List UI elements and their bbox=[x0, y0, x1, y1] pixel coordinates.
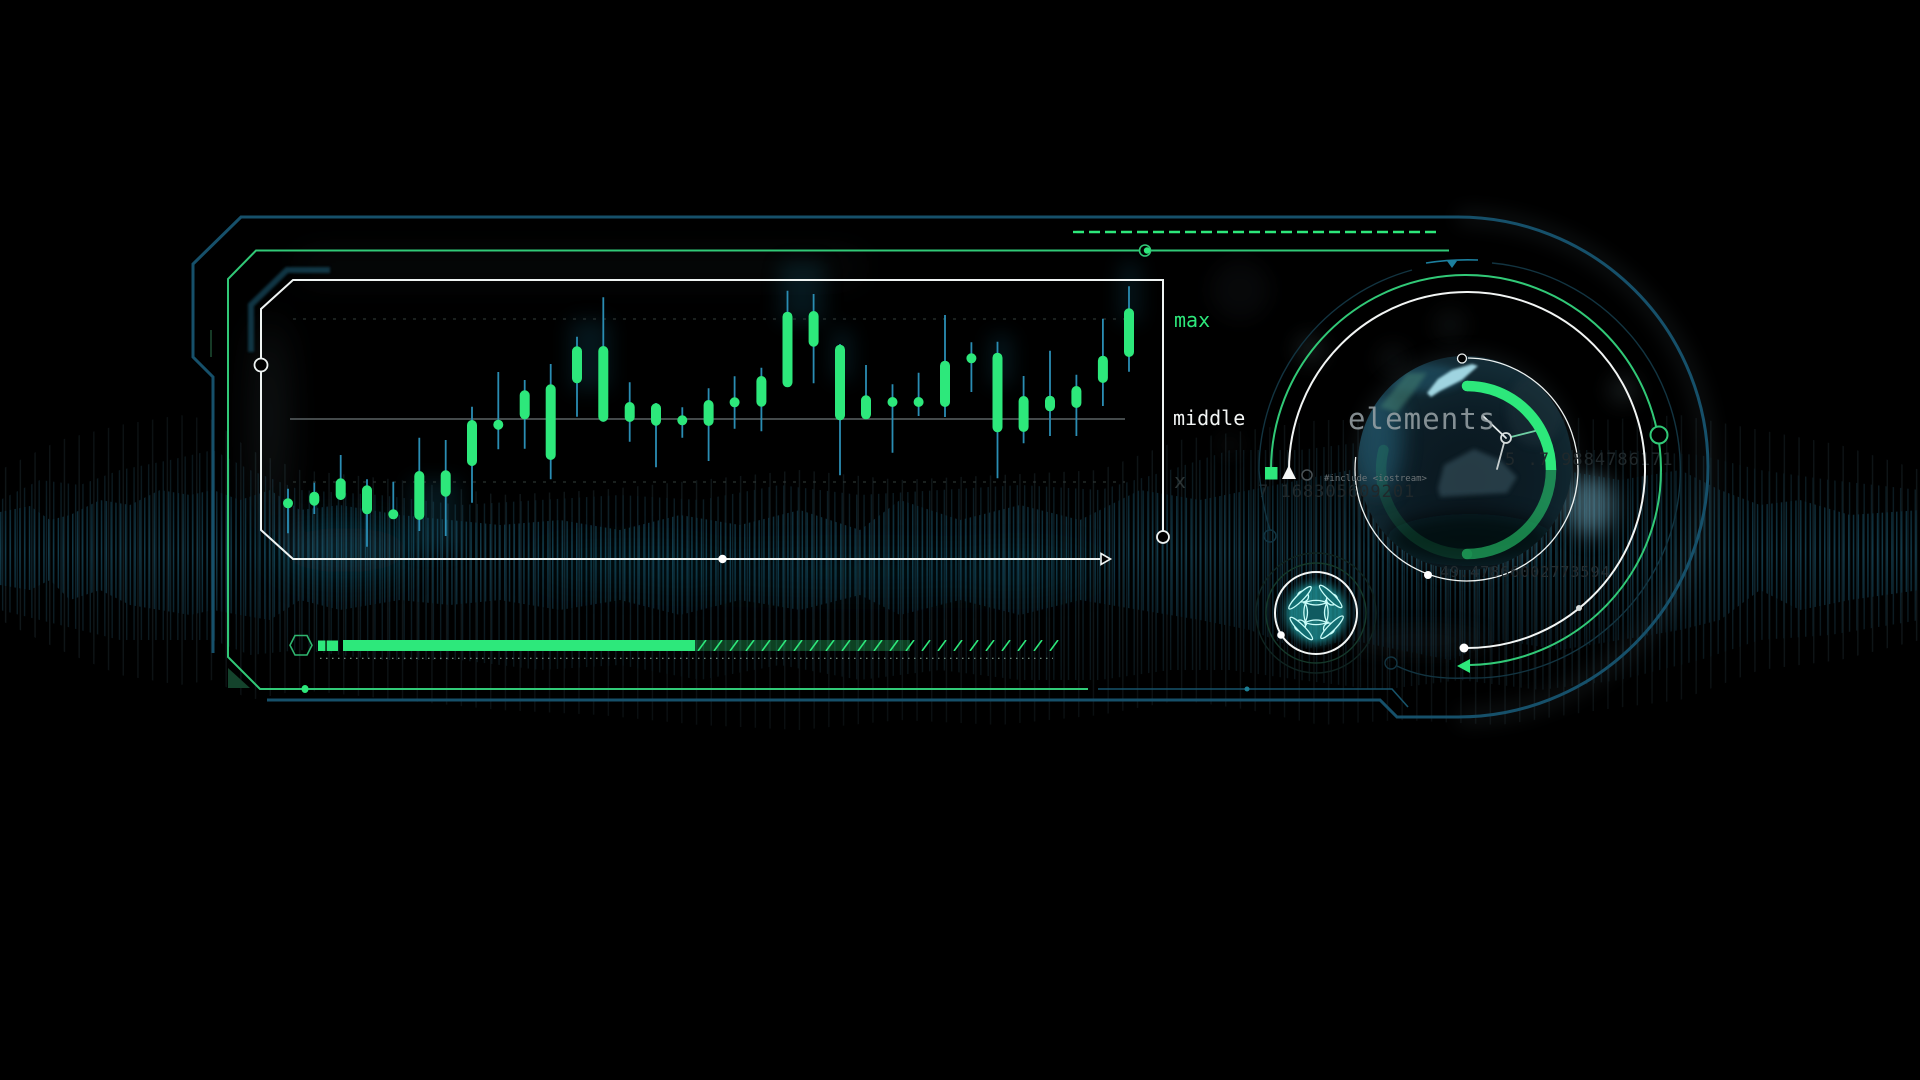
teal haze bbox=[258, 262, 1110, 580]
frame knob bbox=[1140, 245, 1150, 256]
axis labels bbox=[1173, 308, 1245, 493]
chart grid lines bbox=[290, 319, 1125, 482]
faint numbers: 7 168305609201 bbox=[1258, 482, 1415, 502]
progress bar bbox=[290, 636, 1059, 658]
label: middle: middle bbox=[1173, 406, 1245, 430]
white ring bbox=[1282, 292, 1645, 652]
top marker bbox=[1426, 260, 1478, 268]
corner accent bbox=[251, 270, 330, 352]
faint numbers: 5 .7 9884786171 bbox=[1505, 450, 1674, 470]
waveform background bbox=[0, 410, 1920, 730]
candle glows bbox=[410, 262, 1140, 550]
icon: drone bbox=[1287, 583, 1345, 642]
title: elements: elements bbox=[1348, 402, 1496, 436]
faint numbers: 49.47866002773594 bbox=[1440, 563, 1611, 581]
chart white frame bbox=[254, 280, 1169, 564]
code label: #include <iostream> bbox=[1324, 474, 1428, 484]
candle bodies bbox=[288, 313, 1129, 515]
outer teal frame bbox=[193, 217, 1708, 717]
clock hands bbox=[1483, 416, 1535, 469]
green ring bbox=[1265, 275, 1668, 673]
bokeh highlights bbox=[1210, 260, 1637, 652]
globe progress ring bbox=[1381, 381, 1551, 554]
earth globe bbox=[1354, 356, 1572, 570]
label: max: max bbox=[1174, 308, 1210, 332]
dashed top line bbox=[1073, 231, 1440, 233]
green frame bbox=[228, 250, 1449, 707]
HUD scene bbox=[0, 212, 1918, 730]
faint numbers bbox=[1258, 450, 1674, 581]
faint teal ring bbox=[1259, 263, 1680, 678]
label: x: x bbox=[1174, 469, 1186, 493]
candlestick chart bbox=[288, 286, 1129, 547]
drone badge bbox=[1256, 553, 1376, 673]
candle wicks bbox=[288, 286, 1129, 547]
globe thin white arc bbox=[1355, 354, 1578, 581]
globe halo bbox=[1355, 353, 1575, 573]
